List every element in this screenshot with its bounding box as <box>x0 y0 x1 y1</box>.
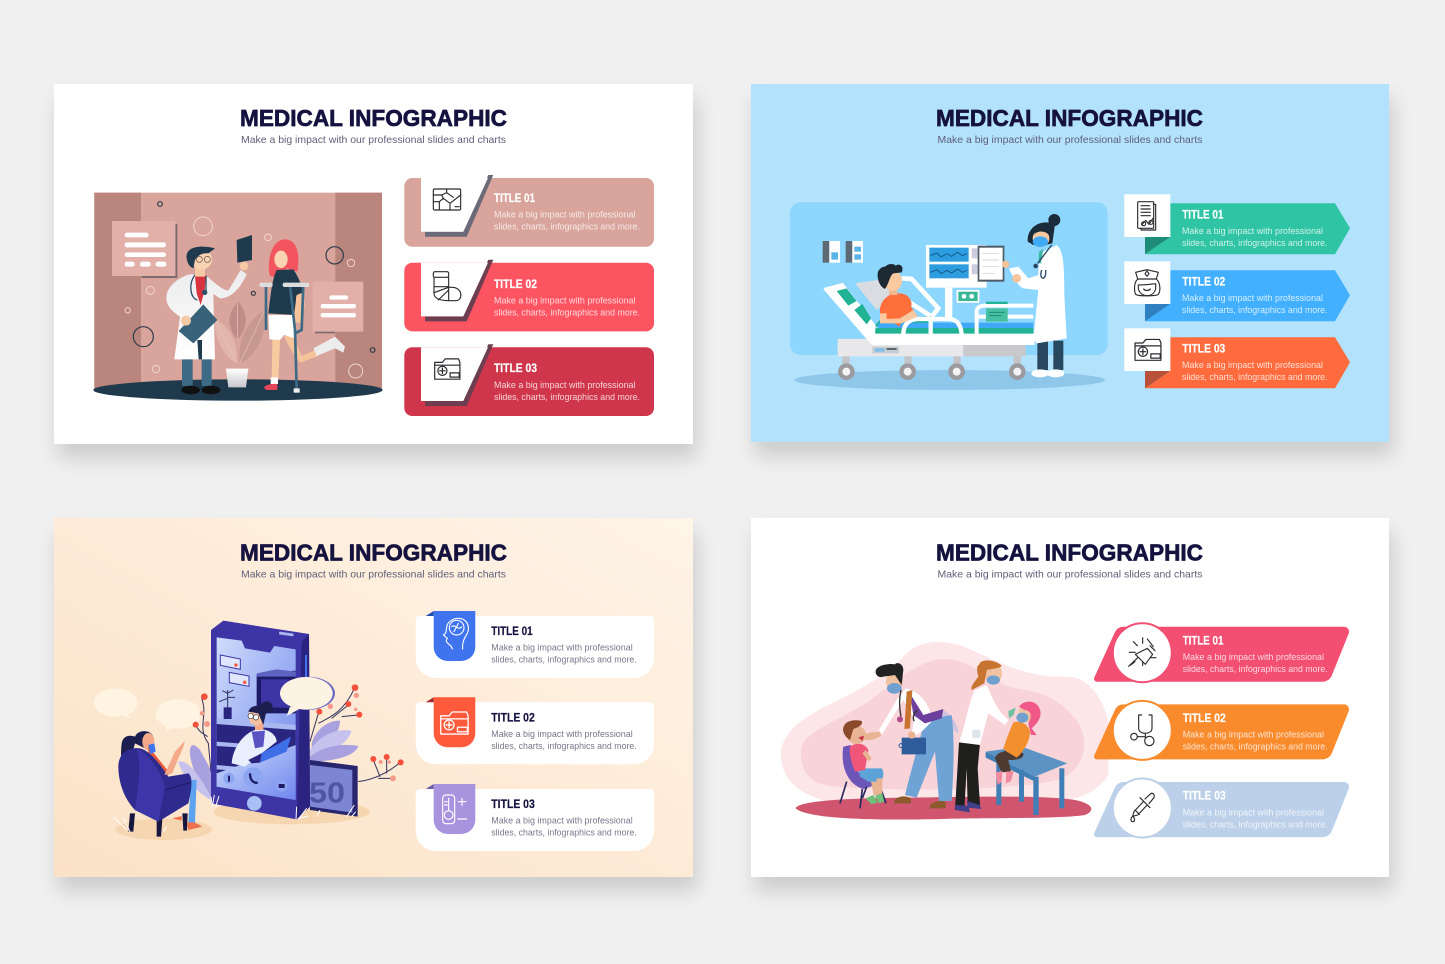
card: crimson title 03 <box>404 344 654 416</box>
heading: slide three title: MEDICAL INFOGRAPHIC <box>240 540 507 566</box>
card: blue title 02 <box>1124 261 1350 321</box>
card: pink title 01: slides, charts, infographics and more. <box>1183 664 1328 674</box>
heading: slide two title: MEDICAL INFOGRAPHIC <box>936 105 1203 131</box>
subtitle: slide four: Make a big impact with our professional slides and charts <box>938 568 1202 580</box>
card: pink title 01: Make a big impact with professional <box>494 210 636 220</box>
text: number on box: 50 <box>309 778 345 810</box>
heading: slide four title: MEDICAL INFOGRAPHIC <box>936 540 1203 566</box>
subtitle: slide two: Make a big impact with our professional slides and charts <box>938 134 1202 146</box>
card: blue title 01: TITLE 01 <box>491 626 533 638</box>
icon: nurse face <box>1135 270 1160 296</box>
card: red title 02 <box>416 697 654 764</box>
card: crimson title 03: TITLE 03 <box>494 363 537 375</box>
icon: leg cast <box>433 272 461 301</box>
illustration: patient in hospital bed with doctor <box>790 202 1108 390</box>
card: blue title 02: TITLE 02 <box>1182 276 1225 288</box>
card: purple title 03 <box>416 784 654 851</box>
card: red title 02: TITLE 02 <box>494 279 537 291</box>
card: orange title 02: slides, charts, infographics and more. <box>1183 742 1328 752</box>
card: orange title 03: slides, charts, infographics and more. <box>1182 372 1328 382</box>
subtitle: slide one: Make a big impact with our professional slides and charts <box>241 134 506 146</box>
card: red title 02: slides, charts, infographics and more. <box>491 741 637 751</box>
icon: stethoscope <box>1131 715 1154 746</box>
icon: x-ray folder <box>441 712 468 734</box>
panel: peach medical slide <box>54 518 697 891</box>
icon: brain in head <box>443 618 468 649</box>
icon: thermometer <box>443 795 467 824</box>
card: orange title 02 <box>1094 701 1349 760</box>
card: blue title 02: Make a big impact with professional <box>1182 293 1323 303</box>
icon: fracture x-ray <box>433 189 461 210</box>
card: orange title 03 <box>1124 328 1350 388</box>
card: light blue title 03 <box>1094 778 1349 838</box>
icon: medical report <box>1138 202 1156 230</box>
panel: blue medical slide <box>751 84 1393 456</box>
icon: x-ray folder <box>435 359 460 379</box>
card: pink title 01: TITLE 01 <box>1183 635 1224 647</box>
card: pink title 01: slides, charts, infographics and more. <box>494 222 640 232</box>
illustration: doctor and patient on crutches <box>93 193 383 401</box>
card: orange title 02: Make a big impact with professional <box>1183 730 1324 740</box>
card: red title 02: Make a big impact with professional <box>491 729 633 739</box>
card: purple title 03: Make a big impact with professional <box>491 816 633 826</box>
panel: pink medical slide <box>54 84 697 458</box>
panel: white pediatric medical slide <box>751 518 1393 891</box>
illustration: telemedicine phone call <box>94 621 404 840</box>
card: blue title 02: slides, charts, infographics and more. <box>1182 305 1328 315</box>
card: red title 02: slides, charts, infographics and more. <box>494 308 640 318</box>
card: blue title 01: slides, charts, infographics and more. <box>491 655 637 665</box>
card: crimson title 03: slides, charts, infographics and more. <box>494 392 640 402</box>
card: light blue title 03: slides, charts, infographics and more. <box>1183 819 1328 829</box>
card: green title 01: Make a big impact with professional <box>1182 226 1323 236</box>
card: orange title 03: TITLE 03 <box>1182 343 1225 355</box>
card: orange title 03: Make a big impact with professional <box>1182 360 1323 370</box>
icon: syringe <box>1129 638 1156 666</box>
icon: x-ray folder <box>1135 339 1161 360</box>
heading: slide one title: MEDICAL INFOGRAPHIC <box>240 105 507 131</box>
card: light blue title 03: TITLE 03 <box>1183 791 1226 803</box>
card: red title 02 <box>404 260 654 331</box>
illustration: doctors examining children <box>781 642 1108 820</box>
card: green title 01: TITLE 01 <box>1182 209 1224 221</box>
card: orange title 02: TITLE 02 <box>1183 713 1226 725</box>
card: light blue title 03: Make a big impact with professional <box>1183 807 1324 817</box>
card: pink title 01: TITLE 01 <box>494 193 536 205</box>
card: red title 02: TITLE 02 <box>491 712 535 724</box>
card: green title 01: slides, charts, infographics and more. <box>1182 238 1328 248</box>
card: pink title 01 <box>1094 623 1349 682</box>
card: crimson title 03: Make a big impact with professional <box>494 380 636 390</box>
card: purple title 03: slides, charts, infographics and more. <box>491 828 637 838</box>
card: pink title 01 <box>404 175 654 247</box>
card: purple title 03: TITLE 03 <box>491 799 535 811</box>
card: blue title 01 <box>416 611 654 678</box>
card: red title 02: Make a big impact with professional <box>494 296 636 306</box>
subtitle: slide three: Make a big impact with our professional slides and charts <box>241 568 506 580</box>
icon: dropper <box>1131 793 1154 822</box>
card: blue title 01: Make a big impact with professional <box>491 643 633 653</box>
card: pink title 01: Make a big impact with professional <box>1183 652 1324 662</box>
card: green title 01 <box>1124 194 1350 254</box>
